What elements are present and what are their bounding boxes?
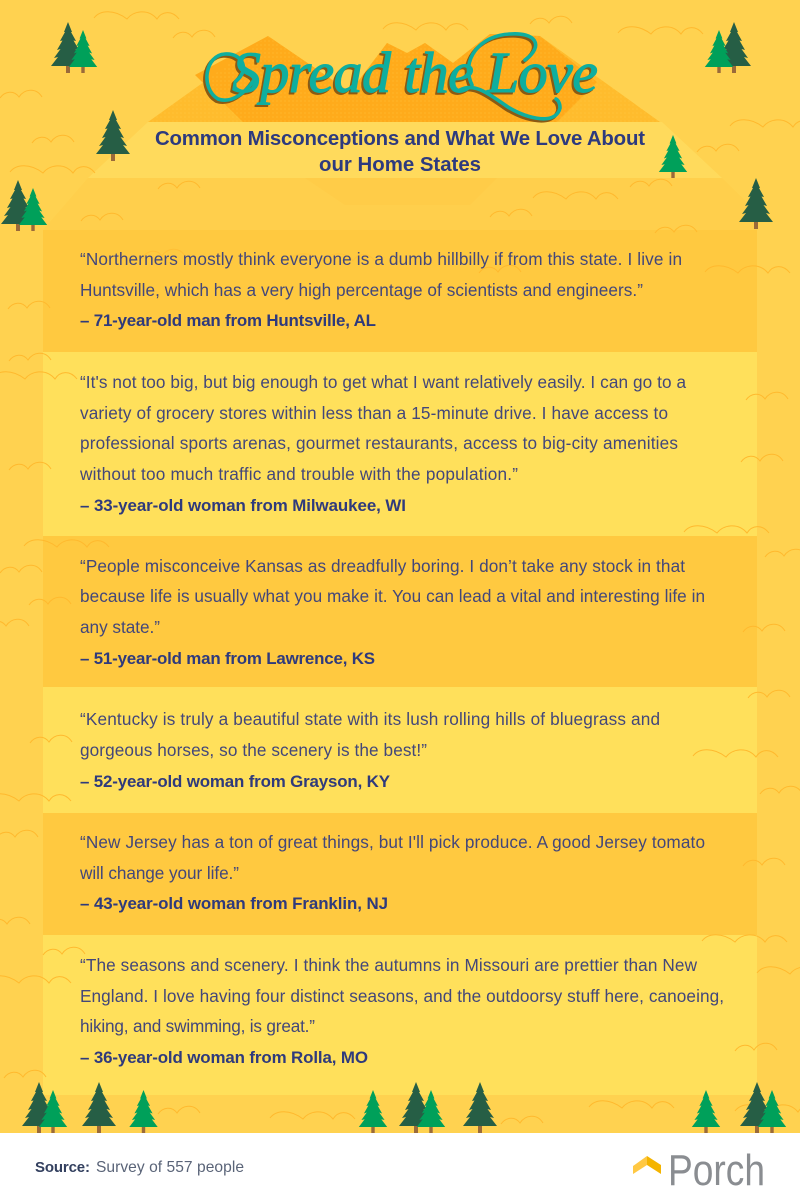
quote panel backgrounds bbox=[43, 230, 757, 1095]
quote 2: without too much traffic and trouble with the population.” bbox=[79, 464, 518, 484]
quote 4: “Kentucky is truly a beautiful state with its lush rolling hills of bluegrass and bbox=[80, 709, 660, 729]
quote 5: will change your life.” bbox=[79, 863, 239, 883]
trees along the bottom bbox=[22, 1082, 786, 1133]
quote 2: – 33-year-old woman from Milwaukee, WI bbox=[80, 496, 406, 515]
subtitle banner shape bbox=[88, 122, 722, 178]
trees: top right pair bbox=[705, 22, 751, 73]
subtitle: Common Misconceptions and What We Love About bbox=[155, 128, 645, 150]
trees: top left pair bbox=[51, 22, 97, 73]
quote 1 bbox=[80, 249, 682, 330]
tree: upper left single bbox=[96, 110, 130, 161]
tree: right single bbox=[739, 178, 773, 229]
footer bbox=[0, 1133, 800, 1202]
subtitle bbox=[155, 128, 645, 176]
quote 4: – 52-year-old woman from Grayson, KY bbox=[80, 772, 390, 791]
source note: Survey of 557 people bbox=[96, 1159, 244, 1176]
quote 3: “People misconceive Kansas as dreadfully boring. I don’t take any stock in that bbox=[80, 556, 685, 576]
quote 3: because life is usually what you make it. You can lead a vital and interesting life in bbox=[80, 586, 705, 606]
source note: Source: bbox=[35, 1159, 90, 1176]
quote 2: “It's not too big, but big enough to get what I want relatively easily. I can go to a bbox=[80, 372, 686, 392]
quote 2: variety of grocery stores within less than a 15-minute drive. I have access to bbox=[80, 403, 668, 423]
quote 5: “New Jersey has a ton of great things, but I'll pick produce. A good Jersey tomato bbox=[80, 832, 705, 852]
quote 2 bbox=[79, 372, 686, 515]
quote 5: – 43-year-old woman from Franklin, NJ bbox=[80, 894, 388, 913]
quote 3: – 51-year-old man from Lawrence, KS bbox=[80, 649, 375, 668]
quote 6: – 36-year-old woman from Rolla, MO bbox=[80, 1048, 368, 1067]
quote 4: gorgeous horses, so the scenery is the best!” bbox=[80, 740, 427, 760]
quote 6: England. I love having four distinct seasons, and the outdoorsy stuff here, canoeing, bbox=[80, 986, 724, 1006]
quote 6: “The seasons and scenery. I think the autumns in Missouri are prettier than New bbox=[80, 955, 698, 975]
mountains behind the title bbox=[148, 34, 660, 122]
title: Spread the Love bbox=[232, 40, 598, 105]
Porch logo bbox=[633, 1146, 765, 1195]
quote 1: – 71-year-old man from Huntsville, AL bbox=[80, 311, 376, 330]
quote 4 bbox=[80, 709, 660, 791]
quote 2: professional sports arenas, gourmet restaurants, access to big-city amenities bbox=[80, 433, 678, 453]
subtitle: our Home States bbox=[319, 154, 481, 176]
quote 6 bbox=[80, 955, 724, 1067]
Porch logo: Porch bbox=[668, 1146, 765, 1195]
lower mountain reflection bbox=[43, 178, 757, 230]
trees: left pair bbox=[1, 180, 47, 231]
tree: banner right bbox=[659, 135, 687, 178]
quote 3: any state.” bbox=[80, 617, 160, 637]
quote 6: hiking, and swimming, is great.” bbox=[80, 1016, 315, 1036]
quote 3 bbox=[80, 556, 705, 668]
quote 1: “Northerners mostly think everyone is a dumb hillbilly if from this state. I live in bbox=[80, 249, 682, 269]
quote 1: Huntsville, which has a very high percentage of scientists and engineers.” bbox=[80, 280, 643, 300]
quote 5 bbox=[79, 832, 705, 913]
